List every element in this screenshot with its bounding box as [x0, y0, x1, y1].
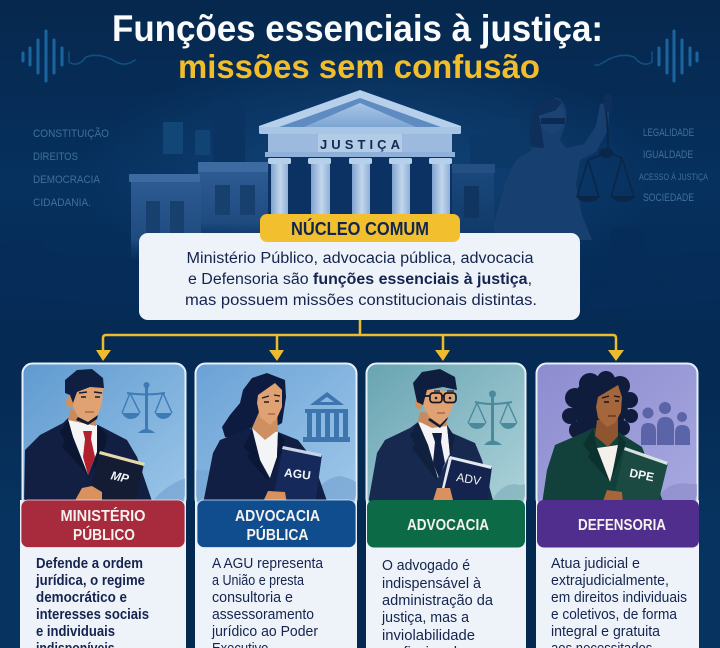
core text box: [139, 233, 580, 320]
description: Ministério Público: Defende a ordem: [36, 556, 143, 572]
portrait: Defensoria: [536, 364, 698, 508]
card: Advocacia Pública: [195, 364, 357, 648]
header: Advocacia: [367, 500, 525, 548]
left keywords: DIREITOS: [33, 151, 78, 163]
portrait: Ministério Público: MP: [110, 468, 131, 486]
core text box: Ministério Público, advocacia pública, advocacia: [186, 250, 534, 267]
core text box: e Defensoria são funções essenciais à justiça ,: [188, 271, 532, 288]
description: Advocacia Pública: [211, 556, 324, 648]
core label badge: [260, 214, 460, 242]
header: Advocacia Pública: PÚBLICA: [246, 526, 308, 544]
title: missões sem confusão: [178, 48, 540, 85]
lady justice silhouette: [490, 94, 636, 240]
header: Ministério Público: MINISTÉRIO: [60, 508, 146, 525]
description: Ministério Público: democrático e: [36, 590, 127, 606]
description: Defensoria: Atua judicial e: [551, 556, 640, 572]
right keywords: [639, 127, 708, 204]
description: Advocacia: justiça, mas a: [381, 610, 470, 626]
description: Defensoria: integral e gratuita: [551, 624, 661, 640]
description: Advocacia Pública: A AGU representa: [212, 556, 324, 572]
building right: [448, 164, 495, 242]
temple: JUSTIÇA: [320, 137, 401, 152]
left keywords: DEMOCRACIA: [33, 174, 101, 186]
right keywords: IGUALDADE: [643, 149, 693, 161]
description: Advocacia: inviolabilidade: [382, 628, 475, 644]
description: Advocacia Pública: assessoramento: [212, 607, 314, 623]
description: Ministério Público: jurídica, o regime: [35, 573, 145, 589]
right keywords: SOCIEDADE: [643, 192, 694, 204]
right keywords: LEGALIDADE: [643, 127, 694, 139]
description: Advocacia: indispensável à: [382, 576, 482, 592]
portrait: Ministério Público: [22, 364, 186, 508]
portrait: Defensoria: DPE: [628, 466, 655, 484]
description: Advocacia Pública: consultoria e: [212, 590, 293, 606]
description: Advocacia Pública: jurídico ao Poder: [211, 624, 318, 640]
waveform right: [595, 31, 697, 81]
description: Defensoria: [551, 556, 687, 648]
buildings left: [129, 162, 272, 259]
title: [112, 8, 603, 85]
core text box: mas possuem missões constitucionais distintas.: [185, 292, 537, 309]
card: Advocacia: [366, 364, 526, 648]
dark city skyline: [0, 102, 720, 310]
temple: [259, 90, 461, 218]
title: Funções essenciais à justiça:: [112, 8, 603, 49]
left keywords: [33, 127, 109, 209]
waveform left: [23, 31, 135, 81]
description: Ministério Público: [35, 556, 149, 648]
description: Defensoria: extrajudicialmente,: [551, 573, 669, 589]
connector arrows: [96, 320, 624, 361]
portrait: Advocacia Pública: AGU: [283, 465, 312, 483]
card: Ministério Público: [20, 364, 186, 648]
core label badge: NÚCLEO COMUM: [291, 218, 429, 239]
portrait: Advocacia Pública: [196, 364, 356, 508]
left keywords: CONSTITUIÇÃO: [33, 127, 109, 140]
header: Defensoria: [537, 500, 699, 548]
header: Advocacia Pública: [197, 500, 356, 548]
header: Ministério Público: PÚBLICO: [73, 526, 135, 544]
description: Advocacia Pública: a União e presta: [212, 573, 305, 589]
header: Ministério Público: [21, 500, 185, 548]
header: Defensoria: DEFENSORIA: [578, 517, 666, 534]
description: Advocacia: O advogado é: [382, 558, 470, 574]
description: Advocacia: [381, 558, 494, 648]
portrait: Advocacia: ADV: [455, 470, 482, 488]
portrait: Advocacia: [366, 364, 526, 508]
description: Defensoria: e coletivos, de forma: [551, 607, 678, 623]
description: Defensoria: em direitos individuais: [551, 590, 687, 606]
header: Advocacia: ADVOCACIA: [407, 517, 489, 534]
card: Defensoria: [536, 364, 699, 648]
description: Ministério Público: interesses sociais: [36, 607, 149, 623]
description: Ministério Público: e individuais: [36, 624, 115, 640]
description: Advocacia: administração da: [382, 593, 494, 609]
left keywords: CIDADANIA.: [33, 197, 91, 209]
header: Advocacia Pública: ADVOCACIA: [235, 508, 320, 525]
